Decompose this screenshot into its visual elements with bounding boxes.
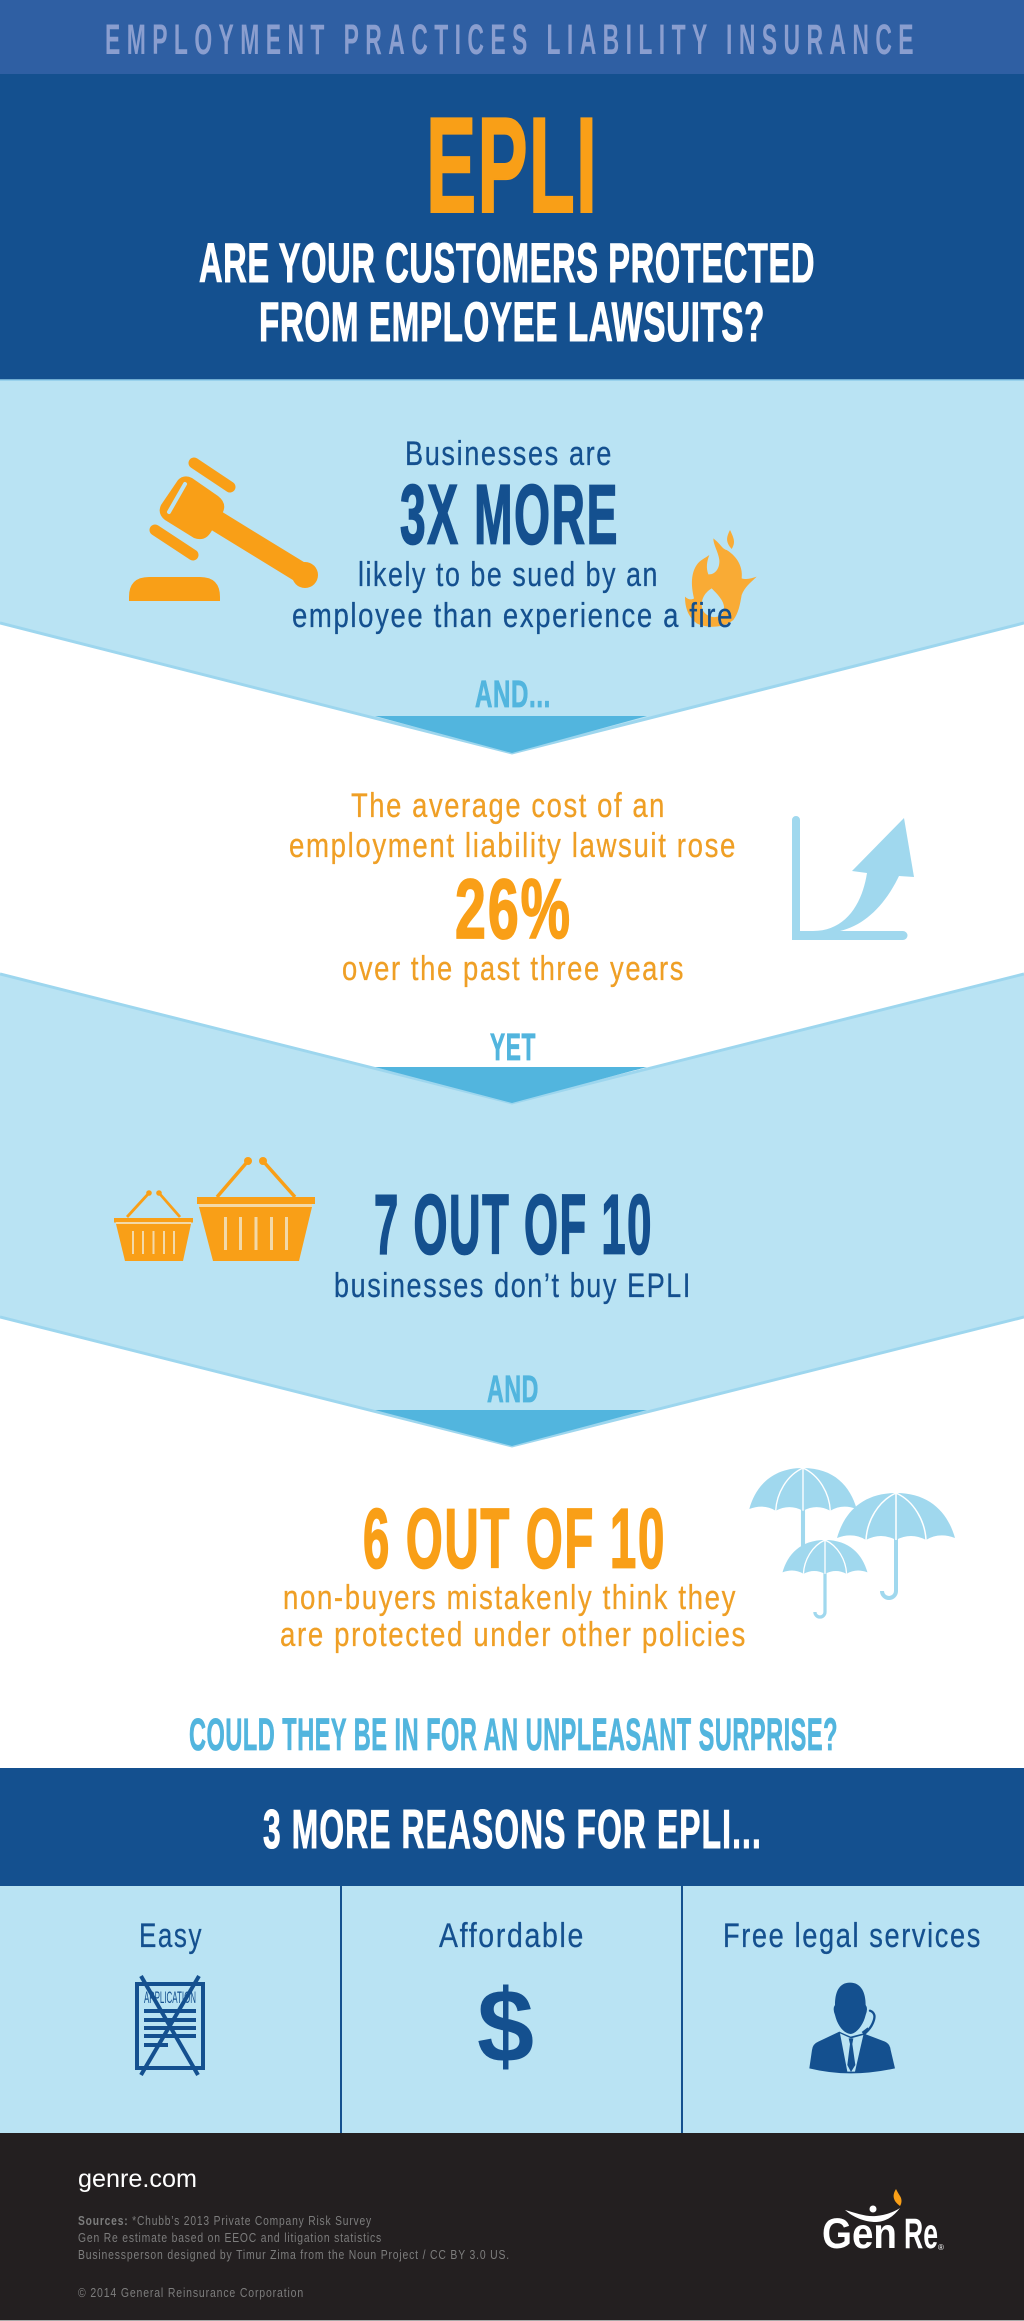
reason: Easy — [137, 1917, 203, 2075]
non-buyers text — [280, 1492, 747, 1654]
icon: rising chart arrow — [792, 816, 914, 940]
statistic text: employee than experience a fire — [292, 597, 734, 635]
statistic text: Businesses are — [405, 435, 613, 473]
icon: crossed-out application: APPLICATION — [144, 1988, 196, 2007]
buyers text: 7 OUT OF 10 — [374, 1178, 653, 1272]
non-buyers text: non-buyers mistakenly think they — [283, 1579, 737, 1617]
statistic text: likely to be sued by an — [358, 556, 659, 594]
icon: dollar sign: $ — [477, 1969, 534, 2085]
sources: Gen Re estimate based on EEOC and litigation statistics — [78, 2231, 382, 2245]
panel: buyers statistic — [0, 974, 1024, 1446]
reason: Affordable — [439, 1917, 585, 2085]
icon: businessperson with headset — [809, 1983, 895, 2073]
sources: Sources: *Chubb’s 2013 Private Company Risk Survey — [78, 2214, 372, 2228]
arrow tip — [375, 1067, 647, 1103]
heading band: 3 more reasons — [0, 1768, 1024, 1886]
icon: flame — [685, 530, 757, 627]
statistic text — [292, 435, 734, 635]
icon: crossed-out application — [137, 1976, 203, 2075]
cost text: employment liability lawsuit rose — [289, 827, 737, 865]
icon: umbrellas — [749, 1468, 955, 1617]
statistic text: 3X MORE — [400, 468, 619, 562]
logo: Gen Re: Gen — [822, 2210, 897, 2258]
connector: AND...: AND... — [475, 674, 551, 716]
website: genre.com — [78, 2165, 197, 2193]
reason: Affordable: Affordable — [439, 1917, 585, 1955]
reason: Easy: Easy — [139, 1917, 203, 1955]
top banner — [0, 0, 1024, 74]
connector: YET: YET — [490, 1027, 536, 1069]
icon: gavel — [129, 463, 318, 601]
sources: © 2014 General Reinsurance Corporation — [78, 2286, 304, 2300]
icon: shopping baskets — [114, 1157, 315, 1261]
logo: Gen Re: ® — [938, 2243, 944, 2252]
cost text: The average cost of an — [351, 787, 666, 825]
cost text: over the past three years — [342, 950, 685, 988]
subtitle — [199, 231, 815, 353]
panel: lawsuit cost — [289, 787, 914, 988]
title panel — [0, 74, 1024, 380]
arrow tip — [375, 716, 647, 753]
panel: lawsuit statistic — [0, 380, 1024, 753]
sources: Businessperson designed by Timur Zima from the Noun Project / CC BY 3.0 US. — [78, 2248, 510, 2262]
non-buyers text: are protected under other policies — [280, 1616, 747, 1654]
cost text: 26% — [455, 862, 572, 956]
logo: Gen Re — [822, 2189, 944, 2258]
buyers text: businesses don’t buy EPLI — [334, 1267, 692, 1305]
reason: Free legal services — [723, 1917, 982, 2073]
panel: non-buyers statistic — [189, 1468, 955, 1760]
non-buyers text: 6 OUT OF 10 — [363, 1492, 666, 1586]
footer — [0, 2133, 1024, 2321]
connector: AND: AND — [487, 1369, 539, 1411]
title: EPLI: EPLI — [426, 89, 598, 241]
panel: reasons — [0, 1886, 1024, 2133]
sources — [78, 2214, 510, 2300]
logo: Gen Re: Re — [904, 2210, 938, 2258]
buyers text — [334, 1178, 692, 1305]
cost text — [289, 787, 737, 988]
